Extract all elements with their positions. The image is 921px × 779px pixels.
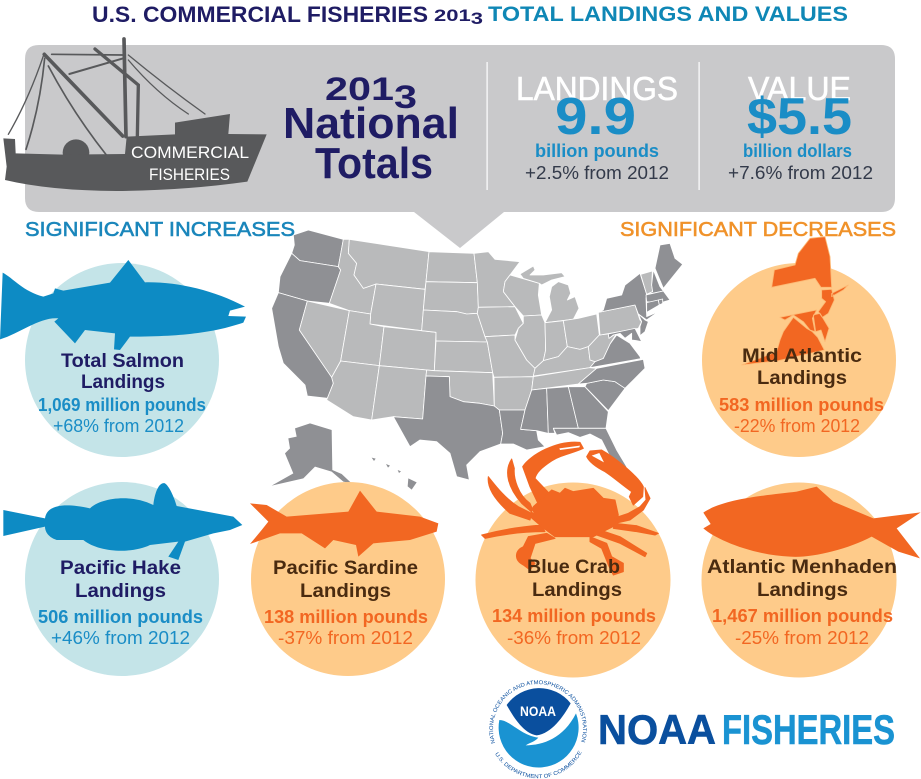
heading: 2013 National Totals: Totals — [315, 139, 433, 188]
salmon text: 1,069 million pounds — [38, 395, 206, 415]
salmon text — [38, 351, 206, 436]
sardine text: 138 million pounds — [264, 607, 428, 627]
landings stat: LANDINGS — [516, 70, 678, 107]
hake text — [38, 558, 203, 648]
panel: atlantic menhaden — [702, 482, 921, 678]
heading: 2013 National Totals: 3 — [394, 79, 417, 115]
heading: 2013 National Totals: National — [283, 99, 459, 148]
map: Alaska — [272, 423, 352, 486]
value stat: billion dollars — [743, 141, 852, 161]
logo: NOAA seal: NATIONAL OCEANIC AND ATMOSPHERIC ADMINISTRATION — [489, 680, 587, 744]
icon: fishing boat — [3, 39, 267, 191]
crab text: Blue Crab — [527, 557, 620, 578]
heading: significant decreases: SIGNIFICANT DECREASES — [620, 219, 896, 241]
sardine text: -37% from 2012 — [278, 628, 413, 648]
menhaden text — [707, 557, 897, 648]
crab text — [492, 557, 656, 648]
title: 201 — [434, 6, 462, 25]
icon: crab — [482, 442, 658, 575]
hake text: Landings — [75, 581, 166, 602]
map of the United States — [272, 230, 683, 490]
logo: NOAA seal — [489, 680, 587, 778]
panel: pacific sardine — [250, 482, 445, 676]
panel: national totals — [3, 39, 895, 248]
mid atlantic text: Landings — [757, 368, 847, 389]
mid atlantic text: 583 million pounds — [719, 395, 884, 415]
icon: sardine — [250, 491, 438, 557]
boat label: COMMERCIAL — [131, 143, 249, 162]
landings stat — [516, 70, 678, 183]
value stat: +7.6% from 2012 — [728, 163, 873, 183]
salmon text: +68% from 2012 — [53, 416, 184, 436]
mid atlantic text — [719, 346, 884, 436]
logo: NOAA seal: NOAA — [520, 703, 556, 719]
logo: NOAA Fisheries wordmark: NOAA — [598, 706, 716, 753]
panel: total salmon — [0, 260, 246, 457]
title: 3 — [471, 9, 483, 28]
menhaden text: Landings — [757, 580, 848, 601]
crab text: -36% from 2012 — [507, 628, 641, 648]
value stat: $5.5 — [747, 88, 852, 146]
icon: hake — [3, 483, 242, 560]
salmon text: Landings — [81, 372, 165, 393]
panel: blue crab — [476, 442, 670, 678]
menhaden text: 1,467 million pounds — [712, 606, 893, 626]
mid atlantic text: -22% from 2012 — [734, 416, 860, 436]
landings stat: +2.5% from 2012 — [525, 163, 669, 183]
heading: 2013 National Totals — [283, 71, 459, 188]
salmon text: Total Salmon — [61, 351, 184, 372]
map: Hawaii — [372, 458, 417, 490]
logo: NOAA Fisheries wordmark — [598, 706, 895, 753]
boat label — [131, 143, 249, 184]
title: U.S. COMMERCIAL FISHERIES — [92, 2, 428, 27]
landings stat: billion pounds — [535, 141, 659, 161]
panel: mid atlantic — [702, 237, 896, 457]
title — [92, 2, 848, 28]
boat label: FISHERIES — [149, 165, 230, 184]
hake text: +46% from 2012 — [51, 628, 190, 648]
icon: menhaden — [703, 487, 921, 558]
icon: mid atlantic states — [742, 237, 848, 365]
landings stat: 9.9 — [555, 88, 636, 146]
mid atlantic text: Mid Atlantic — [742, 346, 862, 367]
hake text: 506 million pounds — [38, 607, 203, 627]
heading: significant increases: SIGNIFICANT INCREASES — [25, 219, 295, 241]
icon: salmon — [0, 260, 246, 350]
hake text: Pacific Hake — [60, 558, 181, 579]
value stat: VALUE — [748, 70, 851, 107]
sardine text: Pacific Sardine — [273, 558, 418, 579]
crab text: 134 million pounds — [492, 606, 656, 626]
panel: pacific hake — [3, 482, 242, 676]
sardine text — [264, 558, 428, 648]
menhaden text: -25% from 2012 — [735, 628, 869, 648]
value stat — [728, 70, 873, 183]
crab text: Landings — [532, 580, 622, 601]
title: TOTAL LANDINGS AND VALUES — [488, 3, 848, 26]
menhaden text: Atlantic Menhaden — [707, 557, 897, 578]
heading: 2013 National Totals: 201 — [325, 71, 378, 107]
sardine text: Landings — [300, 581, 391, 602]
